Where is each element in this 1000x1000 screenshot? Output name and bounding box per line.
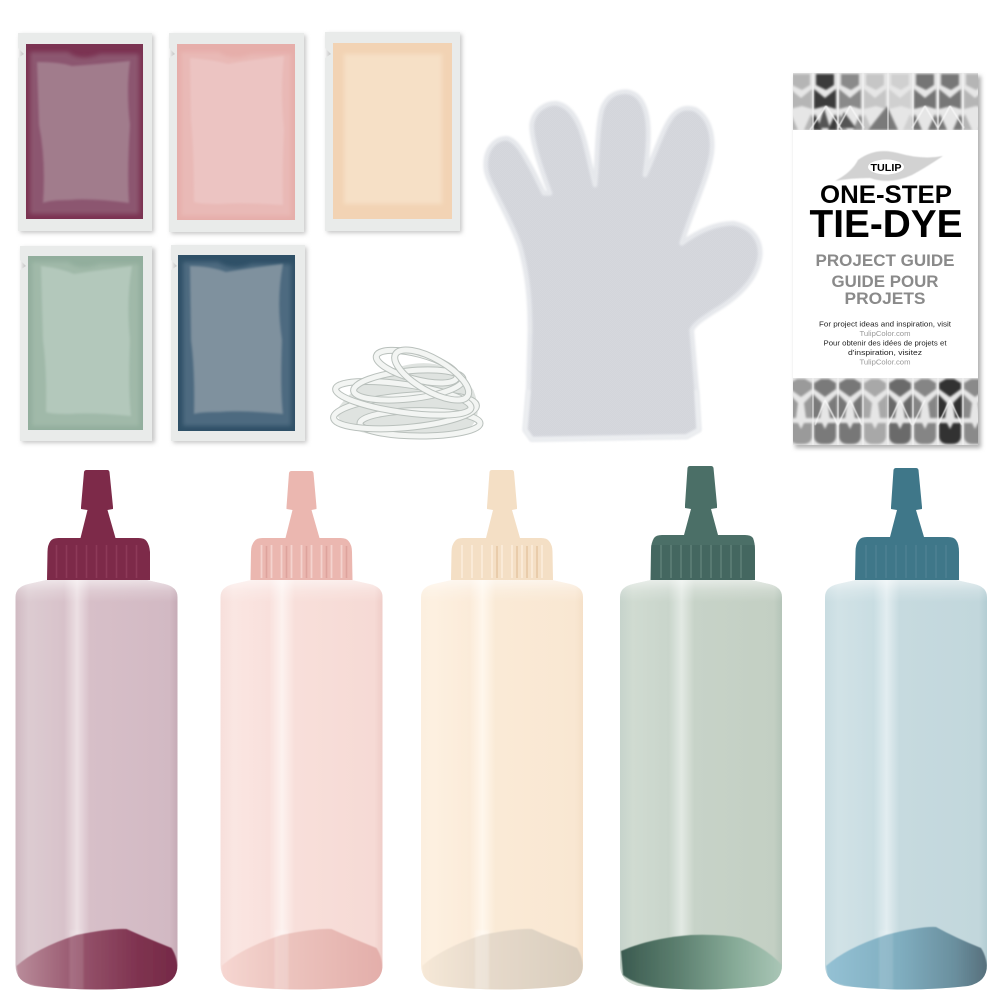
bottle: teal blue <box>825 468 987 991</box>
booklet note: Pour obtenir des idées de projets et <box>824 338 947 348</box>
subtitle <box>816 251 954 308</box>
panel: colour packets <box>18 32 462 443</box>
packet: peach <box>325 32 462 233</box>
booklet note: TulipColor.com <box>860 358 910 366</box>
bottle: peach <box>421 470 583 991</box>
packet: sage <box>20 246 155 443</box>
packet: slate blue <box>171 245 307 443</box>
subtitle: PROJETS <box>844 289 926 308</box>
booklet note: For project ideas and inspiration, visit <box>819 320 952 328</box>
logo: Tulip splash: TULIP <box>870 162 902 174</box>
tie-dye band: bottom <box>789 378 987 445</box>
subtitle: PROJECT GUIDE <box>816 251 954 270</box>
bottle: pink <box>220 471 383 991</box>
bottle: burgundy <box>16 470 178 991</box>
booklet note <box>819 320 952 366</box>
title: ONE-STEP <box>820 181 952 209</box>
logo: Tulip splash <box>835 151 943 181</box>
title: TIE-DYE <box>810 203 962 246</box>
plastic gloves <box>486 92 760 439</box>
booklet note: TulipColor.com <box>860 329 910 338</box>
packet: burgundy <box>18 33 154 233</box>
packet: pink <box>169 33 306 234</box>
bottle: sage green <box>620 466 783 991</box>
subtitle: GUIDE POUR <box>832 272 938 291</box>
tie-dye band: top <box>789 73 987 130</box>
project guide booklet <box>789 73 987 448</box>
title <box>810 181 962 246</box>
booklet note: d'inspiration, visitez <box>848 348 922 357</box>
rubber bands <box>332 340 480 438</box>
